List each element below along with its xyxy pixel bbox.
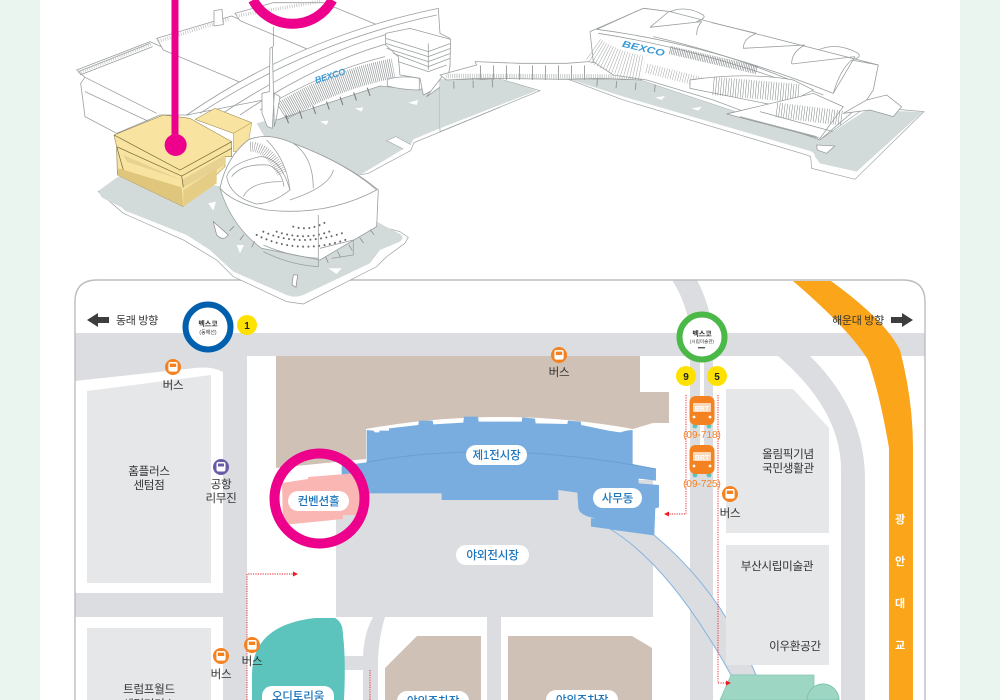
bus stop: north bbox=[550, 347, 570, 378]
dome hall bbox=[590, 8, 902, 153]
direction: Dongrae: 동래 방향 bbox=[116, 314, 158, 327]
label: art museum: 부산시립미술관 bbox=[741, 560, 814, 573]
bus stop: north: 버스 bbox=[549, 366, 570, 379]
bus stop number 09-718: (09-718) bbox=[683, 430, 721, 441]
tower bbox=[262, 27, 280, 128]
bridge: Gwangan bbox=[793, 281, 913, 700]
airport limousine stop: 리무진 bbox=[205, 492, 237, 505]
icon: BRT bus 2 bbox=[690, 445, 714, 477]
label: office building bbox=[593, 488, 642, 508]
label: Home Plus: 홈플러스 bbox=[128, 464, 170, 478]
label: bridge name: 광 bbox=[895, 513, 905, 526]
station: Bexco Donghae line: 벡스코 bbox=[198, 319, 218, 328]
line badge 5 bbox=[707, 366, 727, 386]
marker pin line bbox=[164, 0, 185, 145]
main hall arched facade bbox=[187, 8, 450, 120]
line badge 5: 5 bbox=[714, 372, 720, 383]
direction: Haeundae: 해운대 방향 bbox=[832, 313, 884, 327]
bus stop: north-west bbox=[164, 359, 184, 390]
label: parking 1 bbox=[397, 691, 469, 700]
bus stop: south-west 1: 버스 bbox=[211, 668, 232, 681]
line badge 9 bbox=[676, 366, 696, 386]
icon: BRT bus 2: BRT bbox=[695, 455, 710, 462]
walkway arc bbox=[610, 529, 756, 675]
label: bridge name: 교 bbox=[895, 640, 905, 652]
callout ring: top bbox=[253, 0, 332, 24]
building: Home Plus bbox=[87, 375, 211, 583]
building: green dome bbox=[807, 684, 839, 700]
building: highlighted convention hall (yellow) bbox=[114, 108, 252, 207]
plazas bbox=[440, 79, 924, 179]
icon: BRT bus 1: BRT bbox=[695, 406, 710, 413]
icon: BRT bus 1 bbox=[690, 396, 714, 428]
building: round auditorium bbox=[165, 0, 418, 267]
logo: BEXCO on dome: BEXCO bbox=[621, 39, 667, 59]
panel: campus map bbox=[75, 280, 925, 700]
building: art museum bbox=[726, 545, 829, 665]
direction: Dongrae bbox=[87, 313, 158, 327]
label: convention hall: 컨벤션홀 bbox=[298, 494, 340, 508]
label: bridge name: 안 bbox=[895, 555, 905, 568]
connector bridge bbox=[440, 62, 673, 90]
outdoor exhibition area bbox=[336, 480, 653, 617]
bridge connector left bbox=[427, 65, 500, 97]
station: Bexco art museum: (시립미술관) bbox=[690, 338, 715, 345]
parking lots bbox=[385, 636, 481, 700]
building: Olympic centre bbox=[726, 389, 829, 533]
building: auditorium bbox=[252, 618, 345, 700]
line badge 1: 1 bbox=[244, 321, 250, 332]
building: first exhibition hall and office bbox=[342, 417, 659, 535]
label: bridge name: 대 bbox=[895, 596, 905, 610]
station: Bexco art museum: 벡스코 bbox=[692, 329, 712, 338]
walking routes bbox=[247, 395, 727, 700]
marker pin dot bbox=[165, 134, 187, 156]
logo: BEXCO on hall: BEXCO bbox=[314, 67, 347, 85]
label: convention hall bbox=[288, 491, 349, 511]
label: parking 2 bbox=[546, 690, 618, 700]
label: outdoor exhibition: 야외전시장 bbox=[466, 549, 519, 562]
label: first exhibition hall bbox=[466, 445, 527, 465]
bus stop: south-west 1 bbox=[212, 648, 232, 680]
3D illustration: right complex bbox=[440, 8, 924, 179]
bus stop: east bbox=[720, 486, 740, 518]
label: auditorium bbox=[262, 686, 334, 700]
label: bridge name bbox=[895, 513, 905, 652]
building: green pavilion bbox=[720, 675, 814, 700]
station: Bexco Donghae line bbox=[186, 304, 230, 350]
building: Trump World bbox=[87, 628, 211, 700]
building: brown hall bbox=[276, 356, 669, 468]
callout ring: convention hall bbox=[274, 454, 364, 544]
label: first exhibition hall: 제1전시장 bbox=[472, 449, 521, 462]
bus stop: east: 버스 bbox=[720, 507, 741, 520]
airport limousine stop: 공항 bbox=[211, 478, 232, 491]
rear exhibition halls bbox=[77, 1, 380, 133]
plaza: main bbox=[257, 78, 500, 187]
label: Home Plus: 센텀점 bbox=[133, 479, 165, 492]
building: convention hall bbox=[282, 473, 361, 525]
label: outdoor exhibition bbox=[456, 545, 529, 565]
plaza: front bbox=[98, 177, 408, 304]
BRT median strip bbox=[700, 360, 704, 450]
plaza arrows bbox=[320, 100, 418, 125]
roads bbox=[75, 280, 925, 700]
line badge 1 bbox=[237, 315, 257, 335]
line badge 9: 9 bbox=[683, 372, 689, 383]
label: Trump World: 트럼프월드 bbox=[123, 683, 176, 696]
bus stop: north-west: 버스 bbox=[163, 379, 184, 392]
bus stop: south-west 2: 버스 bbox=[242, 655, 263, 668]
label: Lee Ufan space: 이우환공간 bbox=[769, 640, 822, 653]
label: Olympic centre: 올림픽기념 bbox=[762, 448, 814, 461]
station: Bexco Donghae line: (동해선) bbox=[199, 329, 217, 336]
bus stop: south-west 2 bbox=[242, 637, 262, 666]
station: Bexco art museum bbox=[680, 314, 724, 360]
bus stop number 09-725: (09-725) bbox=[683, 479, 721, 490]
label: Olympic centre: 국민생활관 bbox=[762, 461, 815, 475]
label: office building: 사무동 bbox=[602, 492, 634, 505]
direction: Haeundae bbox=[832, 313, 913, 327]
3D illustration: left complex bbox=[77, 1, 500, 304]
airport limousine stop bbox=[205, 459, 237, 505]
office block bbox=[386, 28, 451, 95]
